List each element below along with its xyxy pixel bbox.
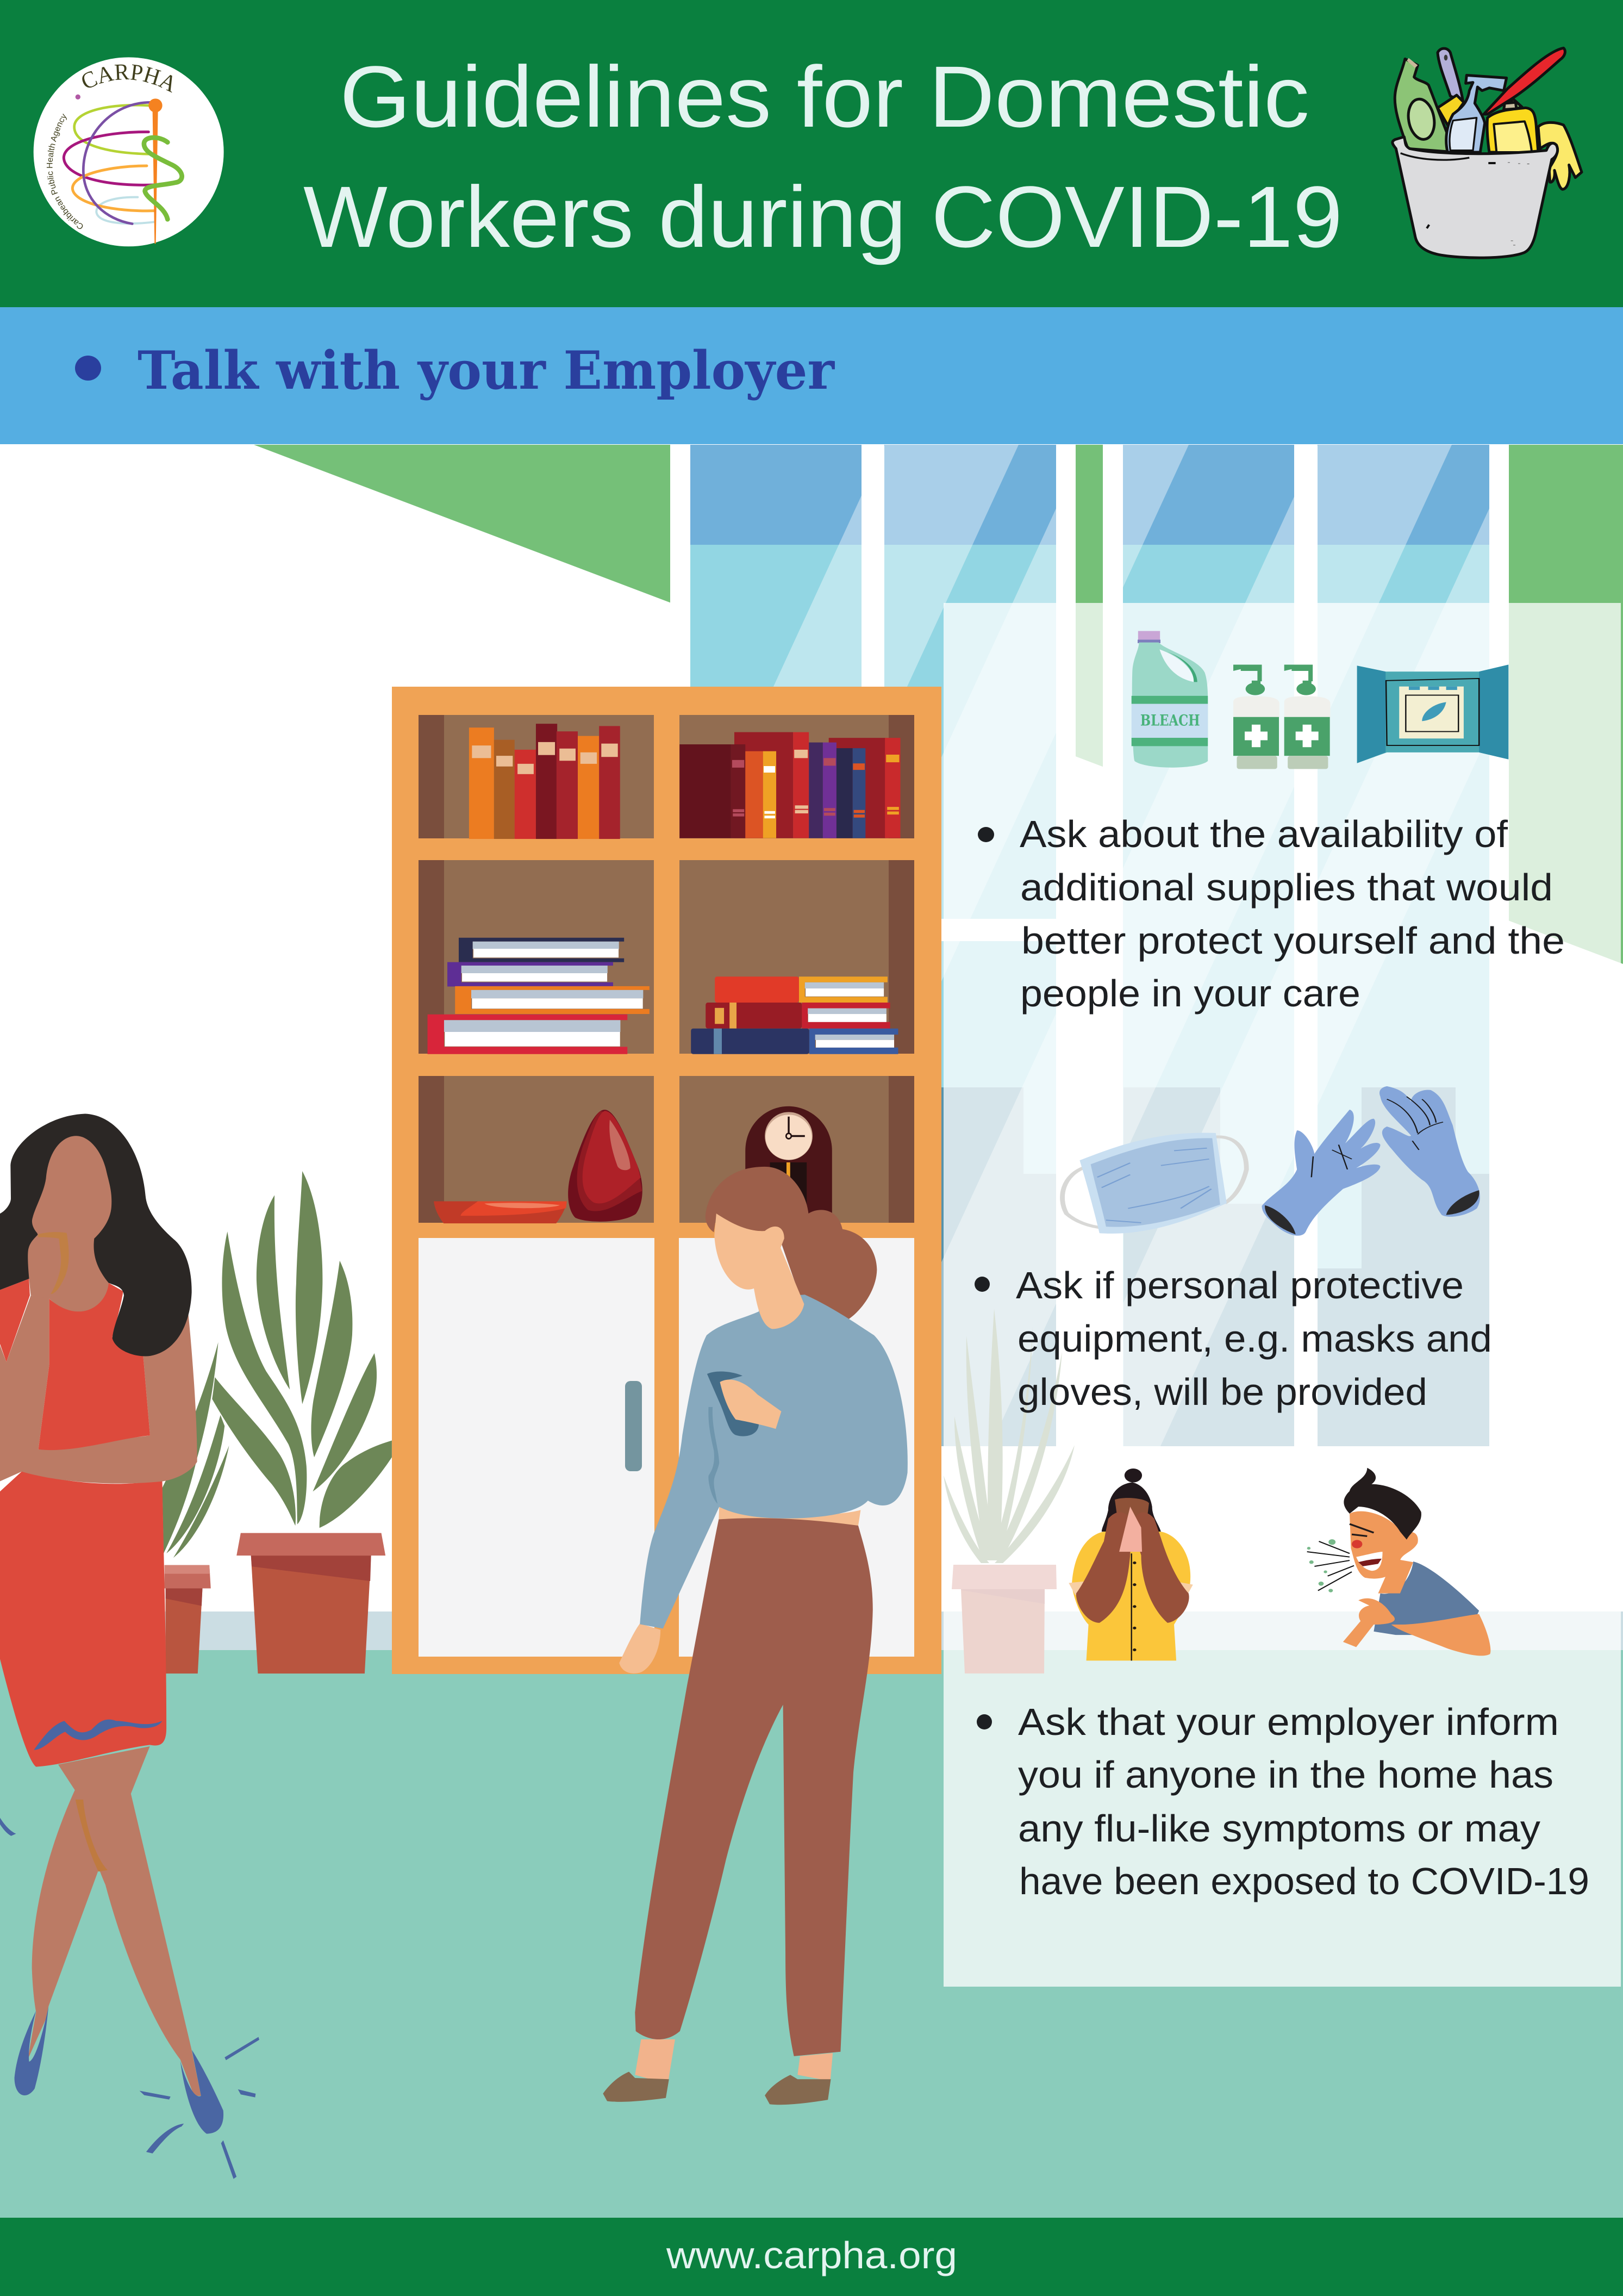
icon: gloves: [1262, 1086, 1480, 1236]
header band: [0, 0, 1623, 307]
text block: supplies: better protect yourself and the: [1021, 919, 1565, 962]
figure: woman in blue sweater: [603, 1167, 908, 2105]
stacked books right: [691, 976, 898, 1054]
trousers: [635, 1518, 873, 2056]
potted plants, left: [162, 1171, 392, 1673]
panel: guidelines: [944, 603, 1621, 1987]
icon: bleach, sanitiser and wipes: [1132, 631, 1508, 769]
text block: employer inform: you if anyone in the home has: [1018, 1753, 1553, 1796]
title: [303, 48, 1343, 265]
stacked books left: [428, 938, 650, 1054]
icon: bleach bottle: [1132, 631, 1208, 768]
icon: sanitiser bottles: [1233, 664, 1330, 769]
text block: employer inform: [977, 1701, 1589, 1902]
text block: protective equipment: equipment, e.g. masks and: [1018, 1317, 1492, 1360]
hair: [706, 1167, 877, 1322]
text block: supplies: people in your care: [1020, 972, 1360, 1015]
text block: protective equipment: [975, 1264, 1492, 1413]
door handle: [625, 1381, 642, 1471]
green wall: [254, 445, 1623, 964]
text block: employer inform: Ask that your employer inform: [1018, 1701, 1559, 1743]
icon: mask and gloves: [1063, 1086, 1480, 1236]
upright books right: [679, 732, 901, 838]
icon: CARPHA logo: Caribbean Public Health Agency: [47, 113, 83, 229]
icon: face mask: [1063, 1133, 1246, 1234]
icon: wipes pack: [1357, 664, 1508, 763]
window with sky and buildings: [670, 445, 1509, 1446]
midriff: [719, 1507, 860, 1526]
band: section heading: [0, 307, 1623, 444]
potted plant, right (behind panel): [944, 1309, 1075, 1673]
dress skirt: [0, 1471, 166, 1767]
hand: [619, 1623, 660, 1673]
icon: CARPHA logo: [34, 57, 224, 247]
icon: CARPHA logo: CARPHA: [82, 64, 172, 92]
title: Guidelines for Domestic: [340, 48, 1309, 145]
text block: supplies: [978, 813, 1565, 1015]
heading: Talk with your Employer: Talk with your Employer: [138, 340, 835, 401]
shoes: [603, 2072, 831, 2105]
floor and baseboard: [0, 1611, 1623, 2218]
text block: protective equipment: gloves, will be provided: [1018, 1371, 1427, 1413]
front plant: [212, 1171, 392, 1528]
back pot: [165, 1565, 211, 1673]
legs, shoes and motion marks: [0, 1471, 259, 2179]
icon: coughing man: [1307, 1468, 1490, 1656]
bullet: [75, 356, 101, 381]
cabinet doors: [419, 1238, 914, 1657]
text block: protective equipment: Ask if personal protective: [1016, 1264, 1464, 1306]
text block: employer inform: have been exposed to COVID-19: [1019, 1860, 1589, 1902]
icon: bleach bottle: BLEACH: [1140, 711, 1200, 730]
upright books left: [469, 724, 620, 839]
icon: sneezing woman and coughing man: [1069, 1468, 1490, 1660]
sleeve and arm detail: [707, 1371, 759, 1436]
vase: [568, 1110, 642, 1222]
footer band: [0, 2218, 1623, 2296]
back plant: [162, 1342, 229, 1558]
sweater: [640, 1295, 908, 1628]
front pot: [236, 1533, 385, 1673]
torso, hair and head: [0, 1113, 197, 1484]
bookshelf: [392, 687, 941, 1674]
text block: supplies: Ask about the availability of: [1020, 813, 1508, 855]
icon: sneezing woman: [1069, 1469, 1193, 1660]
ankles: [635, 2039, 833, 2084]
plate: [434, 1201, 567, 1223]
clock: [745, 1106, 832, 1223]
icon: bucket of cleaning supplies: [1393, 48, 1582, 258]
shelf contents: [428, 724, 901, 1223]
text block: supplies: additional supplies that would: [1020, 866, 1553, 909]
face: [714, 1214, 804, 1329]
text block: employer inform: any flu-like symptoms or may: [1018, 1807, 1540, 1850]
figure: woman in red dress: [0, 1113, 259, 2179]
title: Workers during COVID-19: [303, 168, 1343, 265]
footer URL: www.carpha.org: [666, 2234, 957, 2276]
